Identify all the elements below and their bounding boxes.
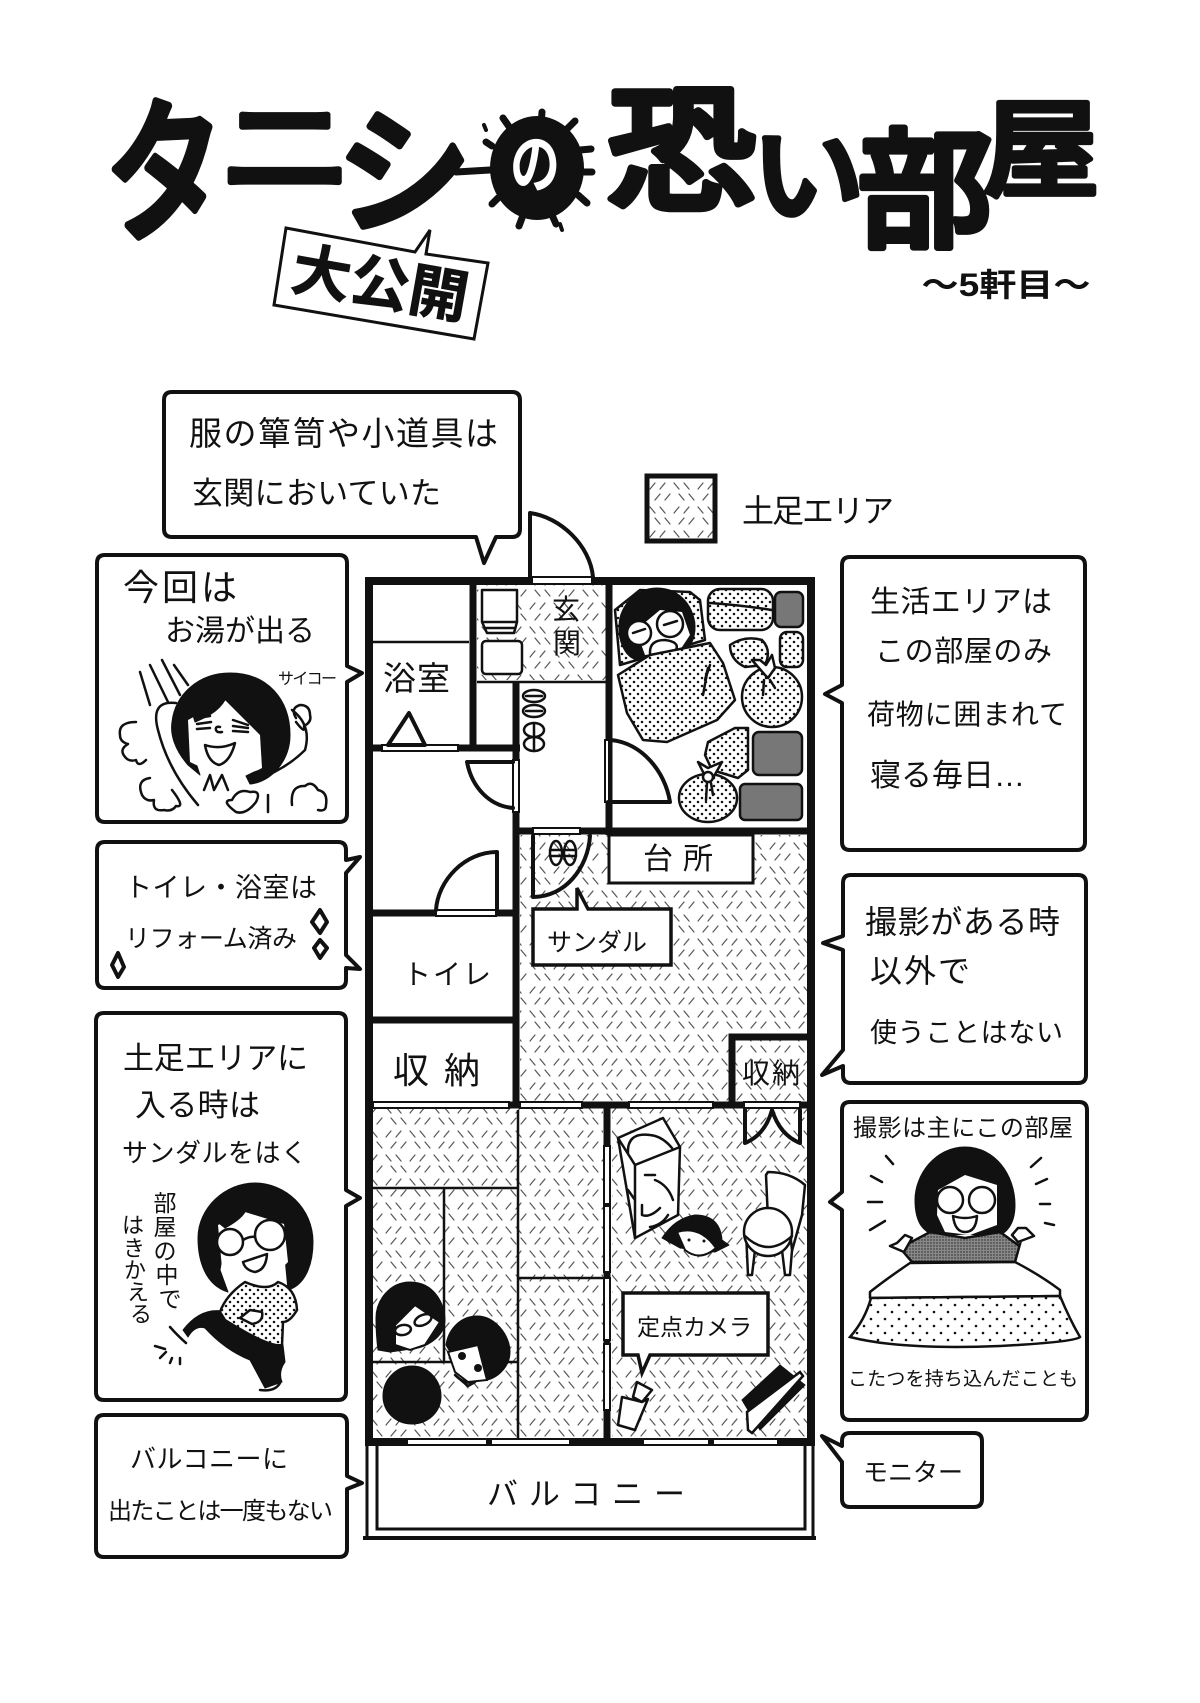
hatched area: living and kitchen [520, 835, 807, 1103]
title [103, 76, 1100, 265]
callout: remodeled toilet and bath: トイレ・浴室は [125, 873, 317, 903]
kitchen box: 台 [643, 843, 673, 876]
legend: 土足エリア [647, 476, 894, 541]
figure: kotatsu table [850, 1262, 1080, 1347]
callout: living area: この部屋のみ [875, 635, 1052, 668]
windows and sliding doors [373, 577, 800, 1445]
room labels: 関 [553, 628, 581, 659]
callout: sandals [96, 1013, 360, 1400]
callout: living area [825, 557, 1085, 850]
callout: monitor [822, 1433, 982, 1507]
callout: 玄関 storage [164, 392, 520, 563]
shoes [523, 690, 545, 751]
callout: balcony [96, 1415, 362, 1557]
vertical note: で [158, 1286, 182, 1312]
hatched area: filming room [612, 1108, 807, 1438]
badge: 大公開: 大公開 [287, 237, 473, 332]
icon: ink splat with の [456, 112, 592, 230]
callout: sandals: 入る時は [135, 1088, 260, 1123]
kitchen box: 所 [683, 843, 713, 876]
legend: 土足エリア: 土足エリア [742, 493, 894, 529]
callout: living area: 生活エリアは [870, 586, 1052, 619]
callout: balcony: 出たことは一度もない [108, 1498, 333, 1525]
hatched area: entrance [477, 585, 606, 680]
figure: woman at kotatsu [868, 1147, 1054, 1262]
hatched area: tatami rooms [373, 1108, 603, 1438]
kitchen box [609, 835, 753, 883]
floor plan [363, 513, 816, 1538]
doll case [618, 1118, 680, 1238]
callout: living area: 寝る毎日… [870, 758, 1025, 793]
room labels: 収納 [742, 1058, 800, 1089]
subtitle: 5軒目: 〜5軒目〜 [922, 267, 1090, 303]
title glyph: ニ: ニ [219, 89, 353, 212]
title glyph: 屋: 屋 [982, 91, 1100, 210]
bedroom: pillow and futon [615, 588, 735, 742]
vertical note [122, 1190, 182, 1327]
figure: woman in bath [140, 660, 307, 812]
callout: remodeled toilet and bath: リフォーム済み [125, 925, 297, 953]
callout: sandals label: サンダル [547, 929, 647, 957]
vertical note: え [127, 1280, 149, 1305]
callout: unused room: 使うことはない [870, 1018, 1063, 1048]
callout: unused room: 撮影がある時 [865, 904, 1060, 940]
room labels: トイレ [403, 959, 491, 990]
icon: ink splat with の: の [510, 130, 560, 202]
room labels [383, 594, 800, 1091]
callout: filming room: 撮影は主にこの部屋 [853, 1115, 1073, 1142]
figure: steam clouds [120, 705, 326, 813]
monitor [742, 1365, 805, 1433]
bath triangle [388, 713, 425, 745]
callout: unused room [822, 875, 1086, 1083]
callout: 玄関 storage: 玄関においていた [192, 476, 441, 511]
callout: sandals: 土足エリアに [123, 1041, 308, 1076]
woman's head on floor [662, 1215, 729, 1256]
callout: filming room: こたつを持ち込んだことも [848, 1368, 1078, 1390]
callout: monitor: モニター [863, 1459, 963, 1487]
callout: balcony: バルコニーに [130, 1444, 288, 1474]
vertical note: る [130, 1302, 152, 1327]
chair [744, 1172, 805, 1275]
vertical note: は [122, 1213, 144, 1238]
callout: hot water [97, 555, 362, 822]
callout: filming room [830, 1102, 1087, 1420]
sandals [550, 841, 576, 865]
vertical note: 部 [154, 1190, 176, 1216]
title glyph: タ: タ [103, 86, 227, 264]
callout: fixed camera [623, 1293, 768, 1373]
callout: sandals label [533, 888, 671, 965]
title glyph: 部: 部 [857, 120, 993, 265]
balcony: バルコニー [487, 1477, 685, 1512]
callout: 玄関 storage: 服の簞笥や小道具は [189, 415, 498, 452]
balcony [363, 1444, 816, 1538]
title glyph: シ: シ [337, 97, 471, 251]
callout: hot water: お湯が出る [165, 615, 315, 648]
room labels: 浴室 [383, 660, 450, 697]
title glyph: 恐: 恐 [606, 76, 756, 229]
room labels: 玄 [552, 594, 580, 625]
vertical note: の [154, 1238, 176, 1264]
vertical note: 屋 [154, 1214, 176, 1240]
doors [436, 513, 800, 1143]
callout: living area: 荷物に囲まれて [867, 699, 1067, 730]
three heads [376, 1282, 510, 1424]
title glyph: い: い [751, 117, 865, 237]
callout: fixed camera: 定点カメラ [637, 1314, 752, 1340]
bedroom: luggage [679, 589, 803, 822]
room labels: 収納 [393, 1050, 480, 1091]
entrance items [482, 590, 522, 674]
vertical note: 中 [156, 1262, 178, 1288]
vertical note: か [124, 1258, 146, 1283]
icon: sparkles [112, 910, 327, 977]
callout: hot water: サイコー [278, 671, 337, 688]
walls [369, 581, 815, 1442]
callout: remodeled toilet and bath [97, 842, 360, 988]
vertical note: き [123, 1236, 145, 1261]
figure: woman kicking [155, 1183, 313, 1390]
callout: unused room: 以外で [870, 953, 970, 989]
callout: hot water: 今回は [123, 567, 237, 608]
camera tissue box [618, 1382, 652, 1430]
callout: sandals: サンダルをはく [122, 1138, 307, 1168]
